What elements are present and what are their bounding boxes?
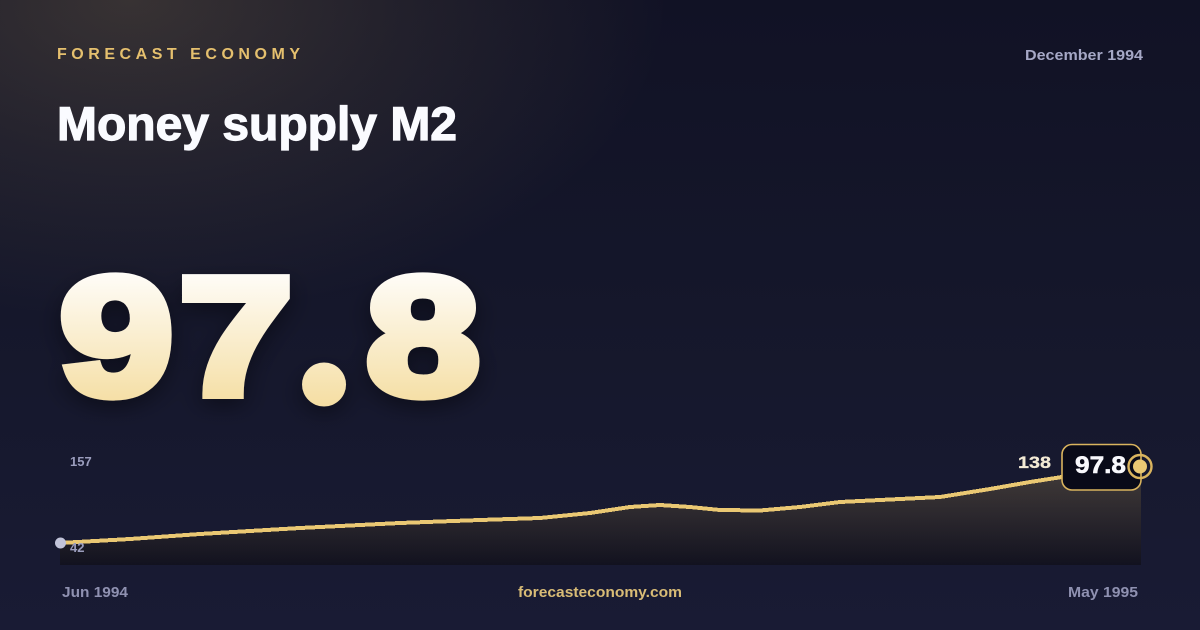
axis min label: 42 (70, 540, 84, 555)
current value badge: 97.8 (1075, 452, 1126, 479)
brand label: FORECAST ECONOMY (57, 46, 300, 63)
x-axis start label: Jun 1994 (62, 585, 128, 601)
current point marker (1128, 455, 1152, 478)
date label: December 1994 (1025, 47, 1144, 64)
title: Money supply M2 (57, 97, 457, 150)
start point marker (55, 538, 66, 548)
chart area fill (60, 466, 1141, 565)
current value badge (1062, 444, 1141, 490)
hero value (60, 243, 480, 430)
hero value: . (296, 243, 352, 430)
chart: money supply trend (55, 444, 1152, 565)
hero value: 8 (366, 243, 480, 430)
source website: forecasteconomy.com (518, 585, 682, 601)
hero value: 97 (60, 243, 293, 430)
chart line (60, 466, 1141, 543)
peak value label: 138 (1018, 453, 1051, 472)
axis max label: 157 (70, 454, 92, 469)
x-axis end label: May 1995 (1068, 585, 1138, 601)
